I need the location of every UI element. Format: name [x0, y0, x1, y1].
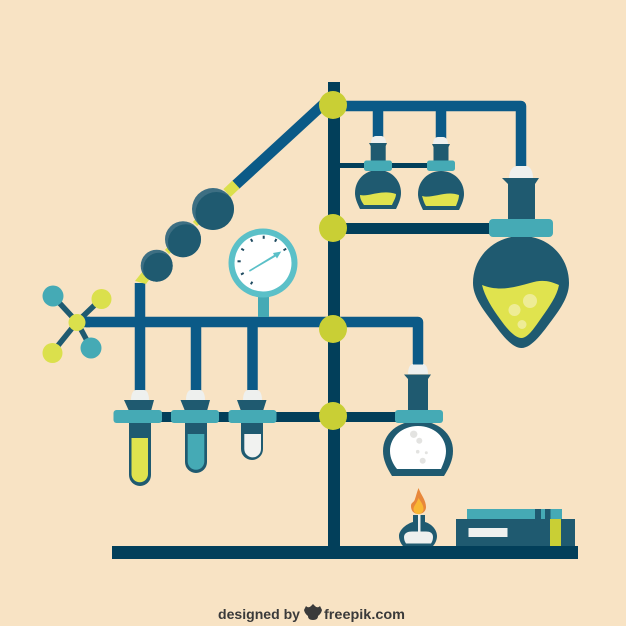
dark support rods	[150, 163, 492, 422]
freepik credit	[218, 604, 405, 622]
diagonal condenser spheres	[135, 184, 238, 285]
small flask left	[355, 136, 401, 209]
vertical stand pole	[328, 82, 340, 547]
test tube teal	[171, 390, 219, 473]
small flask right	[418, 137, 464, 210]
round flask above burner	[383, 360, 453, 476]
molecule model	[42, 286, 112, 363]
large pear flask	[473, 166, 569, 348]
alcohol burner with flame	[399, 488, 437, 546]
freepik credit: designed by	[218, 606, 300, 622]
clamp nodes	[319, 91, 347, 430]
test tube white	[228, 390, 276, 460]
stand base	[112, 546, 578, 559]
blue pipes network	[86, 103, 521, 391]
pressure gauge	[228, 228, 298, 317]
test tube yellow	[114, 390, 162, 486]
freepik credit: freepik.com	[324, 606, 405, 622]
lab apparatus illustration	[42, 82, 578, 622]
stack of books	[456, 509, 575, 546]
